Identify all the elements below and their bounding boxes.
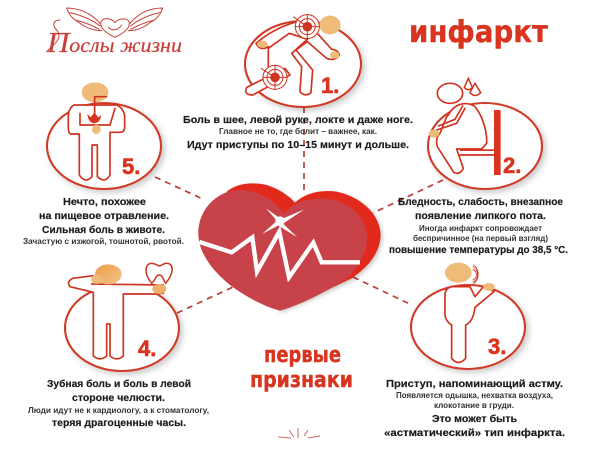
figure 1 xyxy=(246,14,341,95)
icon: cough waves xyxy=(473,265,478,284)
text 5: Сильная боль в животе. xyxy=(42,224,165,236)
text 3: Появляется одышка, нехватка воздуха, xyxy=(396,391,553,400)
logo: Послы жизни xyxy=(46,8,182,59)
target: arm xyxy=(261,65,288,90)
panel 2: pallor and sweat xyxy=(389,78,568,256)
text 2: беспричинное (на первый взгляд) xyxy=(413,233,548,243)
panel 3: asthma-like attack xyxy=(384,263,565,439)
heart back layer xyxy=(227,183,381,311)
text 5: на пищевое отравление. xyxy=(39,210,169,222)
central heart xyxy=(198,183,381,311)
text 3: Приступ, напоминающий астму. xyxy=(386,378,563,390)
icon: sweat drops xyxy=(464,78,481,95)
number 1: 1. xyxy=(321,73,339,98)
circle 3 xyxy=(411,285,525,369)
text 2: повышение температуры до 38,5 °С. xyxy=(389,244,568,256)
text 2: Бледность, слабость, внезапное xyxy=(398,196,563,208)
heart front layer xyxy=(198,190,367,311)
text 4 xyxy=(28,378,209,429)
text 2: появление липкого пота. xyxy=(415,210,546,222)
number 3: 3. xyxy=(488,334,506,359)
subtitle: первые признаки: первые xyxy=(264,343,341,368)
text 5: Зачастую с изжогой, тошнотой, рвотой. xyxy=(23,237,184,246)
subtitle: первые признаки xyxy=(250,343,353,393)
subtitle: первые признаки: признаки xyxy=(250,368,353,393)
panel 5: stomach pain xyxy=(23,82,184,246)
text 3: клокотание в груди. xyxy=(434,401,514,410)
text 1: Идут приступы по 10–15 минут и дольше. xyxy=(187,139,409,151)
panel 1: neck and arm pain xyxy=(183,14,413,151)
target: neck xyxy=(293,14,320,39)
text 4: стороне челюсти. xyxy=(72,392,165,404)
text 4: теряя драгоценные часы. xyxy=(52,417,186,429)
text 5 xyxy=(23,196,184,246)
spark xyxy=(262,208,304,237)
pulse line xyxy=(199,232,360,277)
circle 5 xyxy=(47,103,161,189)
figure 3 xyxy=(445,263,495,362)
text 2 xyxy=(389,196,568,256)
logo: Послы жизни: Послы жизни xyxy=(46,28,182,59)
number 2: 2. xyxy=(503,153,521,178)
number 5: 5. xyxy=(122,154,140,179)
title: инфаркт: инфаркт xyxy=(409,15,549,50)
text 3: Это может быть xyxy=(432,413,518,425)
figure 5 xyxy=(68,82,125,180)
text 3: «астматический» тип инфаркта. xyxy=(384,427,565,439)
text 1: Боль в шее, левой руке, локте и даже ноге. xyxy=(183,114,413,126)
text 1: Главное не то, где болит – важнее, как. xyxy=(219,126,377,136)
circle 4 xyxy=(65,285,179,371)
text 2: Иногда инфаркт сопровождает xyxy=(419,224,542,233)
figure 2 xyxy=(429,78,501,175)
text 1 xyxy=(183,114,413,151)
text 4: Зубная боль и боль в левой xyxy=(47,378,191,390)
text 5: Нечто, похожее xyxy=(63,196,146,208)
number 4: 4. xyxy=(138,336,156,361)
text 4: Люди идут не к кардиологу, а к стоматологу, xyxy=(28,406,209,415)
connector lines xyxy=(155,107,443,313)
panel 4: tooth and jaw pain xyxy=(28,263,209,429)
text 3 xyxy=(384,378,565,439)
decorative rays at bottom xyxy=(278,428,320,438)
icon: tooth xyxy=(146,263,172,283)
figure 4 xyxy=(68,263,172,359)
circle 1 xyxy=(245,21,361,107)
circle 2 xyxy=(428,103,542,189)
